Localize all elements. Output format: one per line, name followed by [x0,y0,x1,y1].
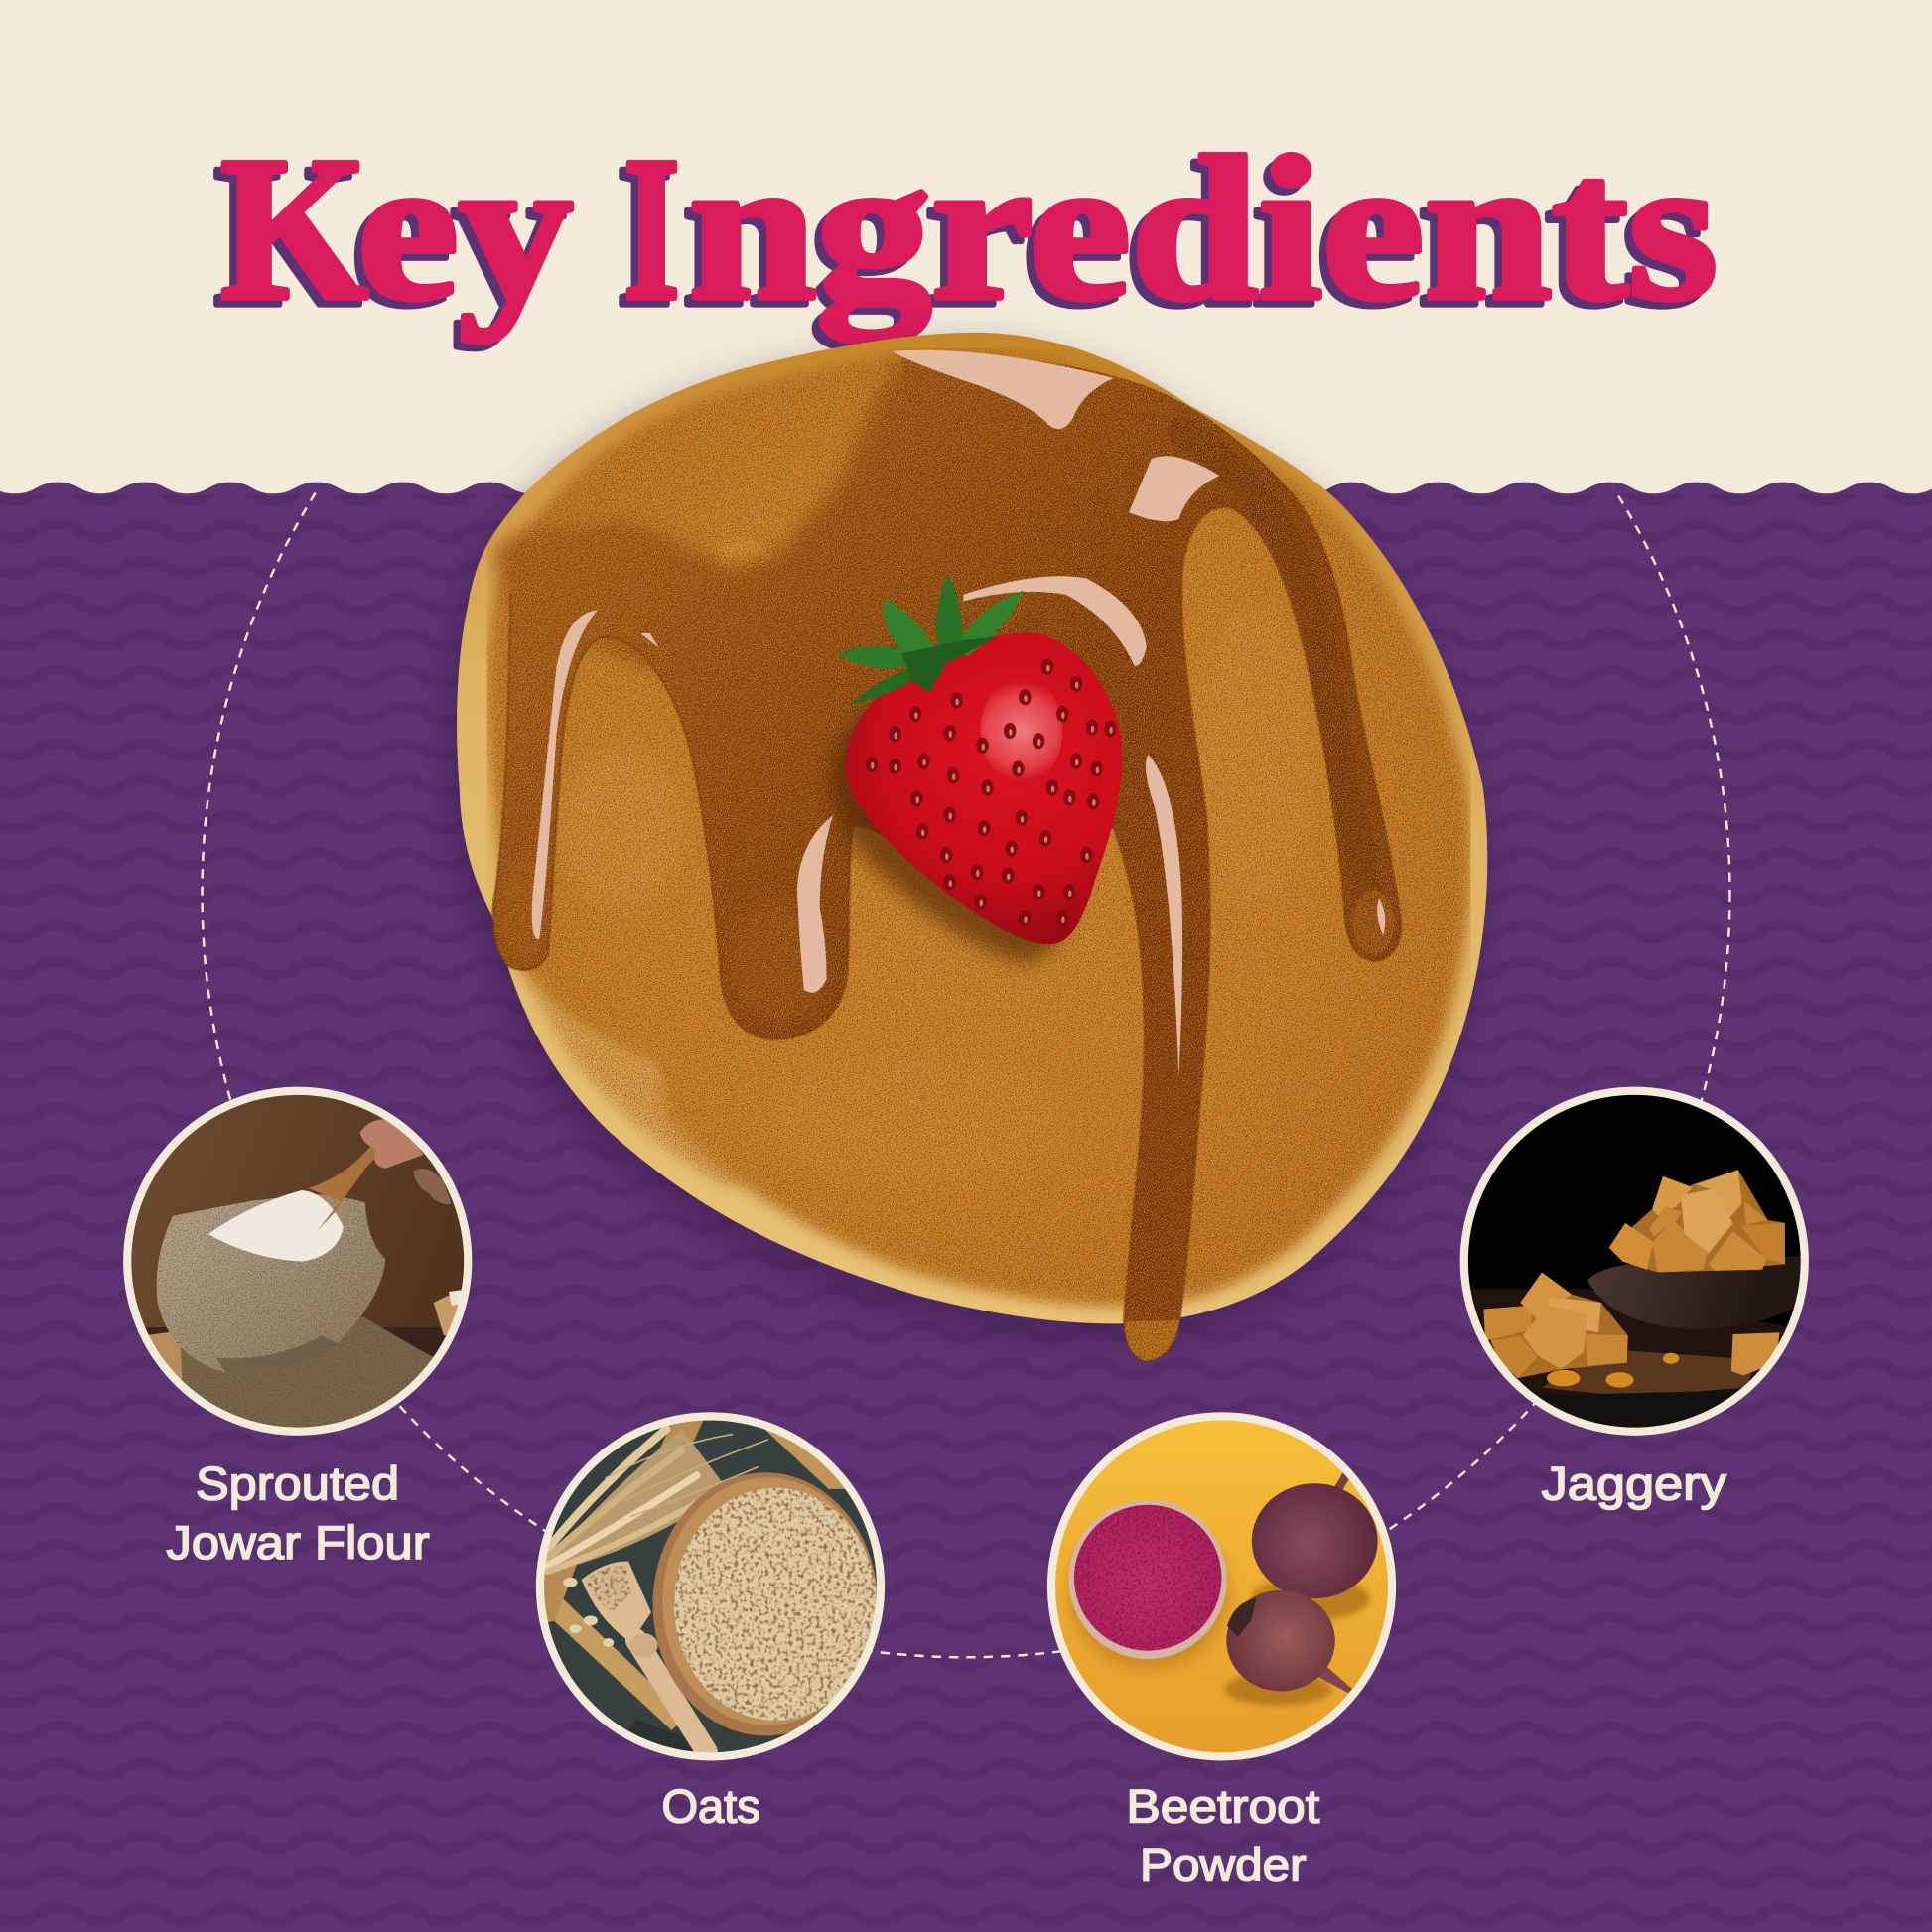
image ring [540,1416,881,1756]
strawberry body [846,632,1122,944]
sack lower [181,1316,433,1428]
darker streaks on right drip [1182,432,1367,889]
ingredient: Sprouted Jowar Flour [123,1086,473,1561]
sack upper [157,1194,385,1373]
pancake body [457,333,1487,1323]
pancake shadow [450,349,1480,1340]
label [1126,1780,1319,1891]
title: Key Ingredients: K [220,114,368,343]
ingredient: Jaggery [1450,1072,1827,1509]
ingredient: Oats [530,1407,895,1833]
dashed connector ring [201,488,1731,1658]
strawberry shadow [831,653,1095,963]
wooden tray [641,1413,707,1489]
strawberry seeds [866,659,1117,927]
flour [208,1190,344,1262]
syrup pour and drips [493,355,1401,1361]
browned pancake surface [487,348,1470,1361]
title: Key Ingredients: ngredients [681,121,1711,350]
bowl [1587,1256,1806,1328]
title: Key Ingredients: I [623,114,680,343]
label [167,1456,430,1569]
title: Key Ingredients: ey [357,114,573,343]
title: Key Ingredients: I [617,121,673,349]
photo: beetroot [1035,1401,1413,1774]
hand [360,1119,423,1169]
oat flakes [674,1488,877,1721]
label: Sprouted [196,1456,399,1509]
photo: flour sack [131,1094,465,1428]
label: Jowar Flour [167,1516,430,1569]
lower pile [1483,1273,1780,1388]
pancake with syrup and strawberry [450,333,1487,1361]
purple wavy background [0,483,1932,1932]
beet bottom [1315,1662,1352,1693]
syrup dark edge [493,492,1401,1361]
spoon [308,1147,375,1231]
label: Jaggery [1542,1456,1726,1509]
powder bowl [1068,1500,1227,1659]
title: Key Ingredients: K [213,121,361,349]
title: Key Ingredients [213,114,1718,350]
title: Key Ingredients: ngredients [689,114,1718,344]
strawberry [838,574,1122,944]
wheat bunch [540,1429,767,1574]
syrup highlights [532,350,1385,1076]
title: Key Ingredients: ey [349,121,566,349]
label: Oats [661,1780,760,1833]
beet shadows [1251,1577,1370,1620]
ingredient: Beetroot Powder [1035,1401,1413,1891]
scoop [582,1562,707,1752]
wood table [1466,1289,1806,1401]
photo: oats bowl [530,1407,895,1768]
label: Powder [1140,1839,1307,1891]
beet top [1315,1472,1349,1511]
label: Beetroot [1126,1780,1319,1833]
image ring [1051,1416,1392,1756]
upper pile [1609,1170,1785,1273]
image ring [127,1091,468,1432]
strawberry leaves [838,574,1024,705]
image ring [1464,1091,1805,1432]
bowl [653,1472,878,1735]
syrup soft upper edge [495,358,1025,667]
cream header background [0,0,1932,495]
photo: jaggery cubes [1450,1072,1827,1446]
